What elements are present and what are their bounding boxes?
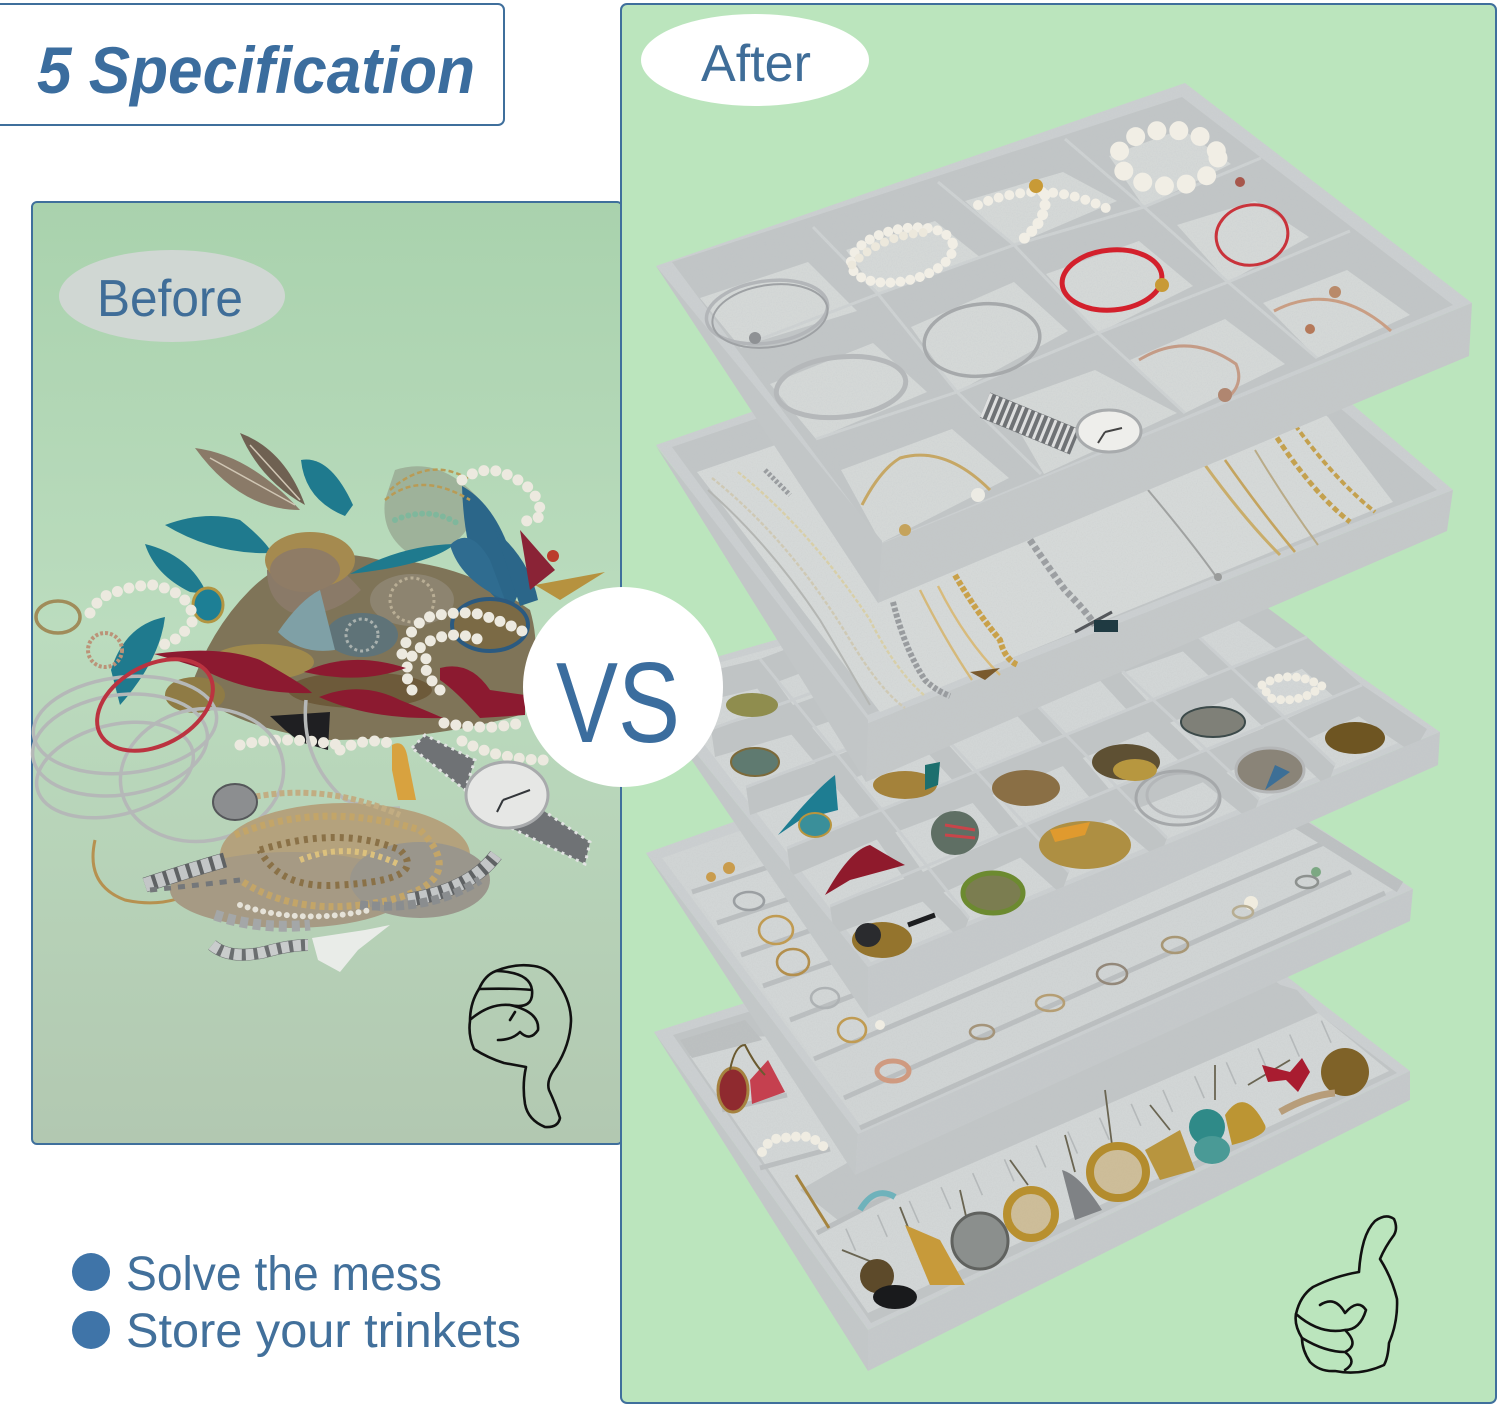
maroon feathers (154, 651, 525, 718)
necklaces (708, 425, 1375, 708)
VS badge (523, 587, 723, 787)
tray 4 body (646, 690, 1413, 1175)
VS badge: VS (556, 640, 680, 767)
tray 4: ring tray (646, 690, 1413, 1175)
orange figure (392, 743, 416, 800)
panel: after (621, 4, 1496, 1403)
icon: thumbs down (470, 965, 571, 1127)
watch and charms (749, 177, 1341, 536)
icon: thumbs up (1296, 1216, 1397, 1373)
tray 5 body (654, 873, 1410, 1371)
bracelets and bangles (702, 130, 1391, 505)
pendant charms (970, 573, 1222, 680)
tray 5: earring tray (654, 873, 1410, 1371)
tray 2: necklace tray (656, 262, 1453, 782)
paper tag (312, 925, 390, 972)
badge: After (641, 14, 869, 106)
text: bullet points: Store your trinkets (126, 1305, 521, 1358)
gold bangle (93, 840, 205, 903)
text: bullet points (72, 1248, 521, 1358)
tray 2 body (656, 262, 1453, 782)
badge: After: After (701, 35, 811, 93)
metal ring (36, 601, 80, 633)
tray 3: grid tray (637, 531, 1440, 1018)
title box: 5 Specification: 5 Specification (37, 33, 475, 107)
tray 3 body (637, 531, 1440, 1018)
red bracelet (81, 641, 229, 769)
badge: Before (59, 250, 285, 342)
badge: Before: Before (97, 270, 243, 328)
title box: 5 Specification (0, 4, 504, 125)
heart charm (213, 784, 257, 820)
watch (412, 735, 590, 864)
dense center of pile (190, 466, 536, 740)
gold and brown center pieces (88, 470, 605, 750)
text: bullet points: Solve the mess (126, 1248, 442, 1301)
compartments contents (726, 677, 1385, 958)
tray 1 body (656, 83, 1472, 603)
panel: before (26, 202, 622, 1358)
teal feathers (111, 460, 538, 705)
earrings (718, 1045, 1369, 1309)
pearl strands (90, 470, 545, 760)
photo: messy jewelry pile (26, 433, 605, 972)
tray 1: 12-compartment tray (656, 83, 1472, 603)
gold and silver chain heap (145, 793, 496, 955)
bangles (26, 668, 400, 854)
rings (706, 862, 1321, 1081)
brown feathers (195, 433, 361, 614)
